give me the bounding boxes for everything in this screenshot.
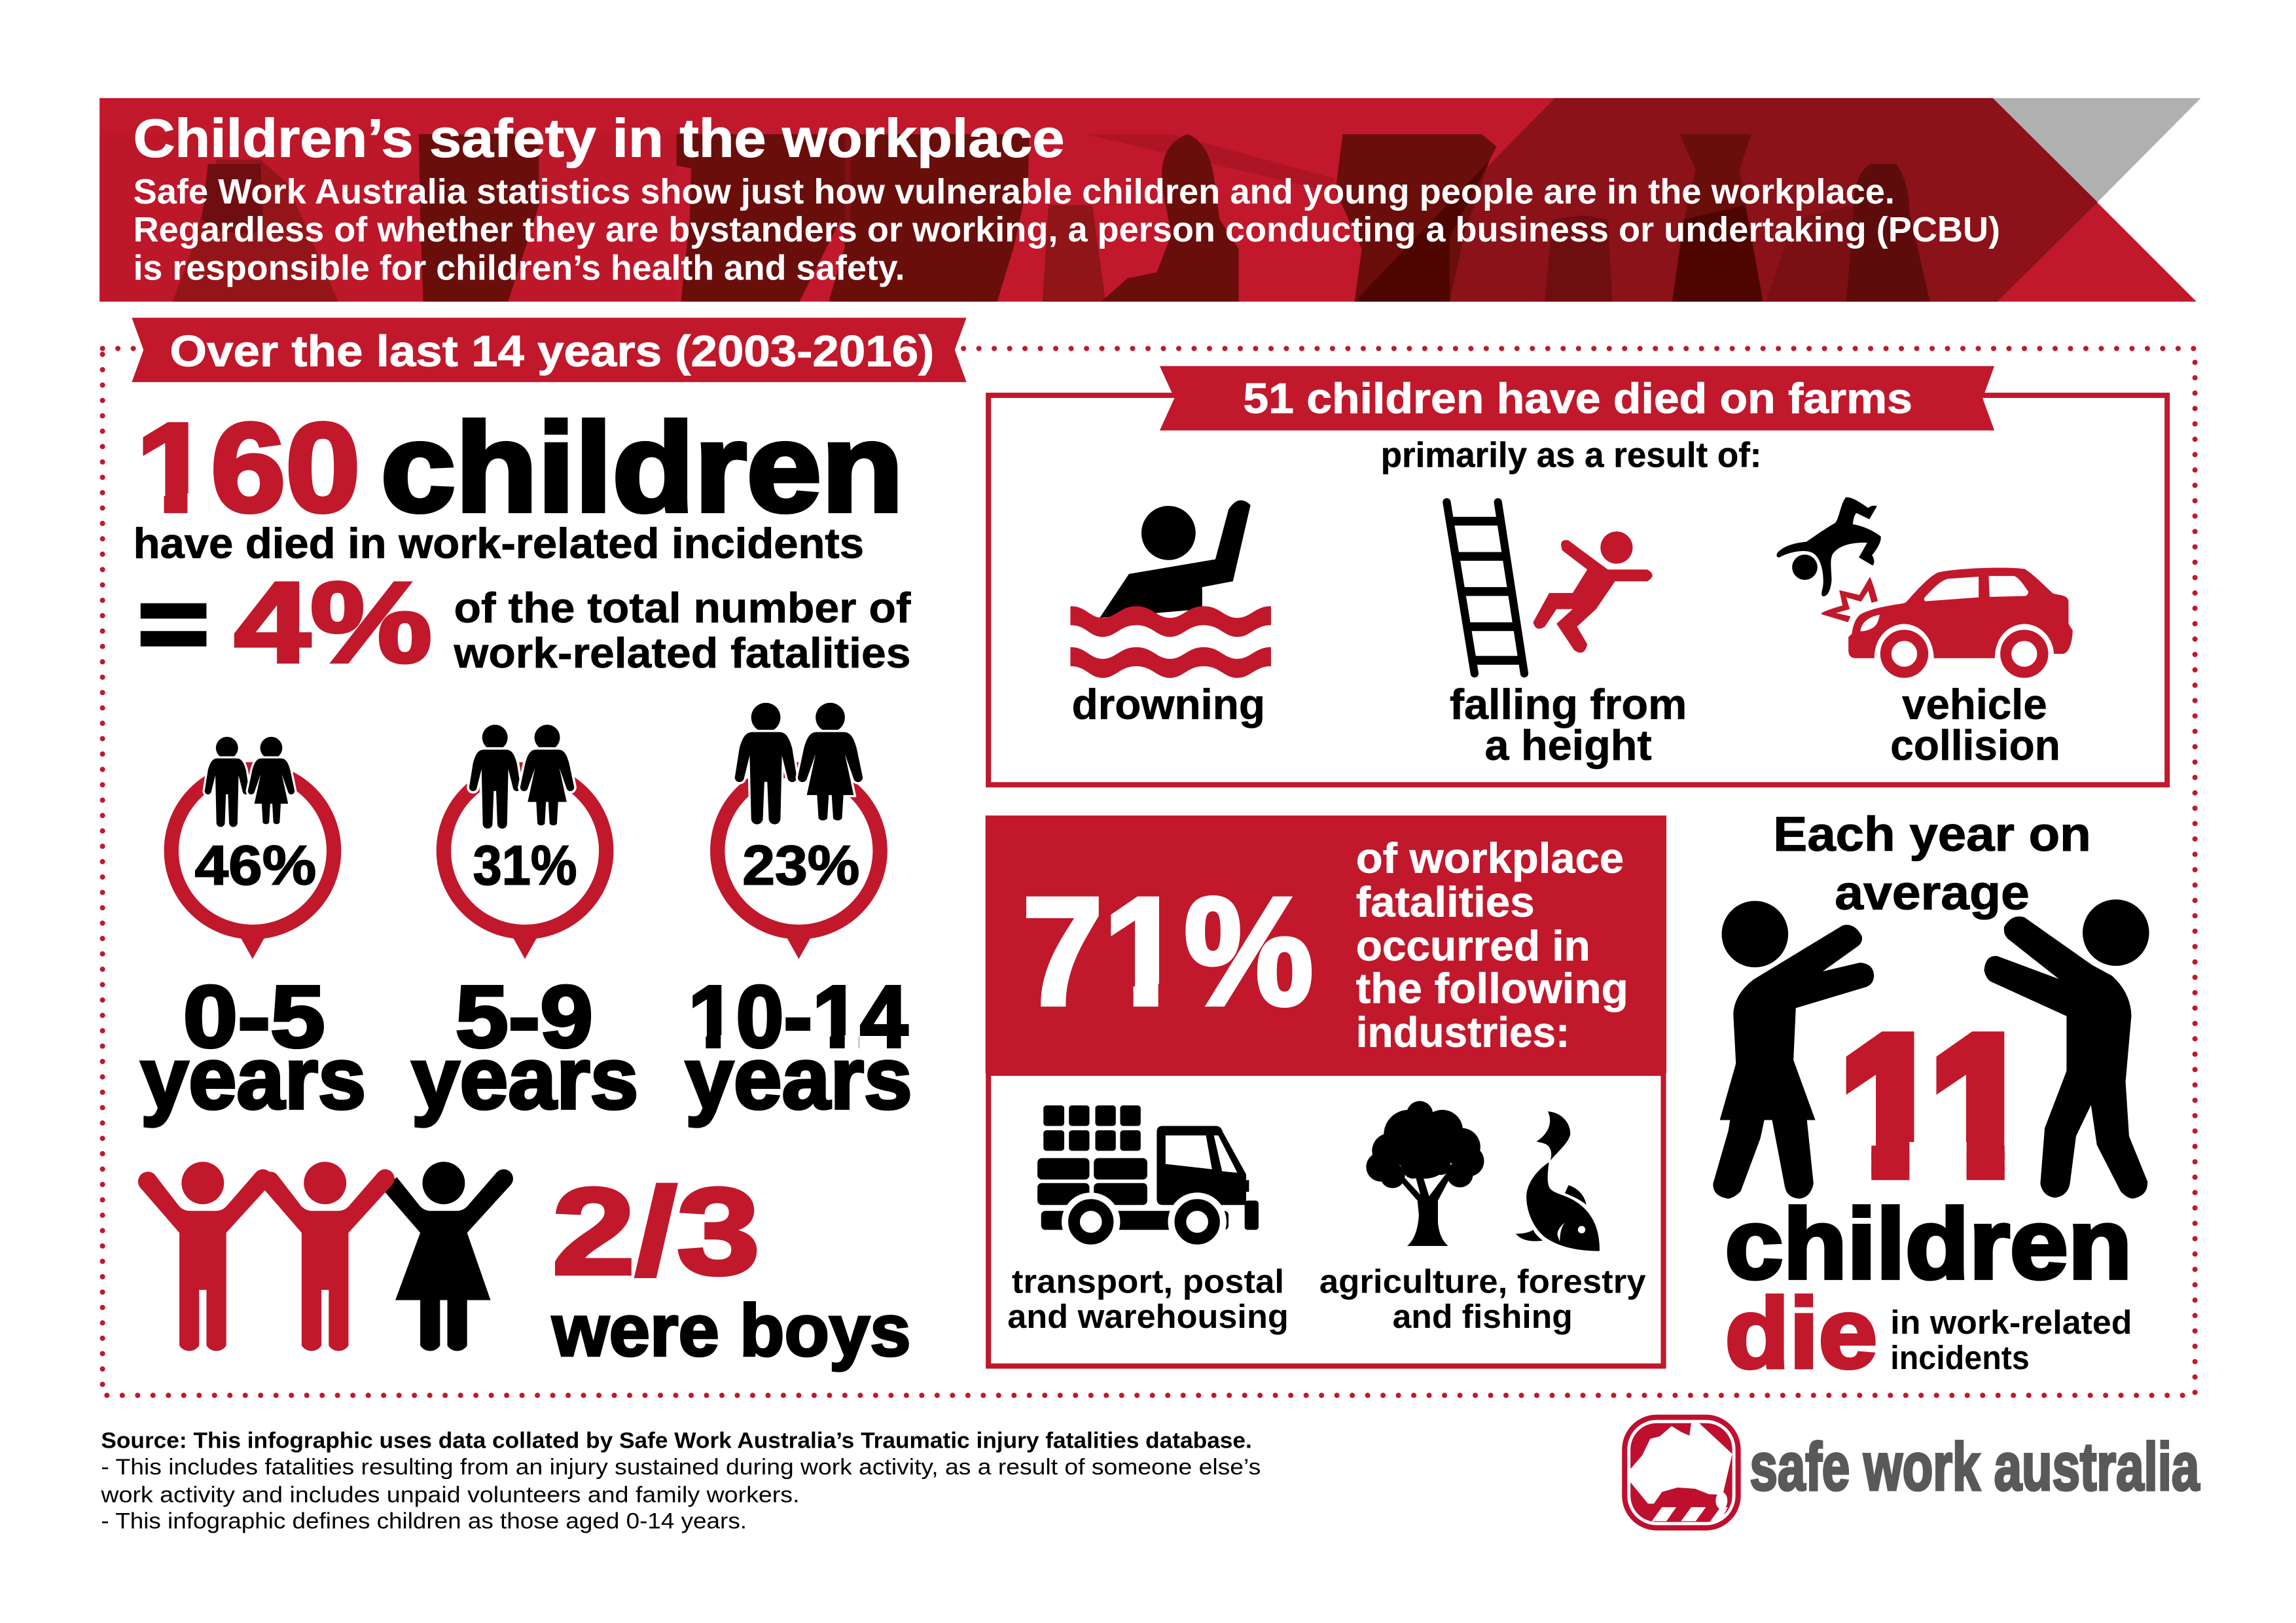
icon: vehicle collision [1776, 497, 2073, 672]
label: transport, postal and warehousing [1007, 1262, 1289, 1335]
text: die: die [1725, 1278, 1877, 1389]
source notes: work activity and includes unpaid volunteers and family workers. [100, 1482, 800, 1507]
text: in work-related incidents [1890, 1303, 2132, 1376]
label: falling from a height: a height [1485, 721, 1652, 769]
stat: 160 children: children [381, 397, 903, 538]
panel: 71 percent of fatalities by industry [986, 815, 1666, 1366]
icon: two boys and a girl with raised arms [138, 1162, 513, 1351]
banner introduction [134, 172, 2000, 287]
text: of workplace fatalities [1356, 834, 1628, 1056]
label: falling from a height: falling from [1450, 680, 1687, 728]
age group: 10-14 years [685, 703, 912, 1128]
heading: each year on average: Each year on [1773, 807, 2091, 861]
source notes [100, 1429, 1261, 1534]
age label [685, 968, 912, 1128]
text: children: children [1725, 1188, 2132, 1300]
age label: 5-9 [456, 968, 593, 1066]
icon: boy reaching [1984, 899, 2149, 1199]
heading ribbon: over the last 14 years: Over the last 14 years (2003-2016) [170, 327, 934, 376]
heading: each year on average [1773, 807, 2091, 919]
pin ring [171, 770, 334, 959]
percent: 23% [742, 834, 859, 897]
stat: equals 4 percent: work-related fatalities [453, 629, 911, 677]
text: of workplace fatalities: occurred in [1356, 922, 1590, 970]
banner introduction: Safe Work Australia statistics show just how vulnerable children and young people are in the workplace. [134, 172, 1895, 211]
stat: two thirds were boys: were boys [551, 1290, 911, 1372]
banner photo: silhouetted people [99, 134, 1930, 302]
stat: 71%: 71% [1022, 865, 1314, 1037]
stat: two thirds were boys [551, 1162, 911, 1372]
icon: tree [1366, 1101, 1484, 1246]
logo mark [1624, 1418, 1738, 1528]
text: have died in work-related incidents: have died in work-related incidents [134, 519, 864, 567]
pin ring [444, 770, 606, 959]
stat: 11: 11 [1840, 997, 2031, 1215]
stat: 160 children [136, 397, 903, 538]
panel: each year on average 11 children die [1713, 807, 2149, 1389]
falling person [1776, 497, 1881, 596]
source notes: Source: This infographic uses data collated by Safe Work Australia’s Traumatic injury fatalities database. [101, 1429, 1252, 1454]
percent: 31% [473, 834, 577, 897]
logo: safe work australia [1624, 1418, 2200, 1528]
banner introduction: Regardless of whether they are bystanders or working, a person conducting a business or undertaking (PCBU) [134, 210, 2000, 249]
age label: years [412, 1029, 638, 1128]
heading: each year on average: average [1835, 865, 2030, 919]
panel: farm deaths [988, 366, 2167, 785]
label: drowning: drowning [1072, 680, 1265, 728]
stat: two thirds were boys: 2/3 [552, 1162, 760, 1300]
icon: girl reaching [1713, 901, 1874, 1199]
impact star [1821, 577, 1878, 622]
icon: drowning [1070, 500, 1271, 678]
icon: boy and girl [205, 737, 295, 827]
icon: falling from a ladder [1446, 502, 1653, 673]
car [1848, 567, 2073, 672]
label: falling from a height [1450, 680, 1687, 769]
age label [412, 968, 638, 1128]
source notes: - This includes fatalities resulting from an injury sustained during work activity, as a result of someone else’s [101, 1455, 1261, 1480]
pin ring [717, 770, 880, 959]
age label: 0-5 [183, 968, 325, 1066]
heading ribbon: 51 children have died on farms: 51 children have died on farms [1243, 374, 1912, 422]
text: of workplace fatalities: industries: [1356, 1008, 1570, 1056]
subheading: primarily as a result of: [1381, 436, 1761, 475]
label: agriculture, forestry and fishing [1319, 1262, 1646, 1335]
age label: years [141, 1029, 366, 1128]
label: vehicle collision [1890, 680, 2060, 769]
text: of workplace fatalities: the following [1356, 965, 1628, 1012]
label: vehicle collision: vehicle [1902, 680, 2047, 728]
text: of workplace fatalities: fatalities [1356, 878, 1535, 926]
text: of workplace fatalities: of workplace [1356, 834, 1624, 882]
panel: header banner [99, 98, 2201, 302]
age label: 10-14 [689, 968, 908, 1066]
stat: equals 4 percent: of the total number of [454, 584, 911, 632]
age group: 0-5 years [141, 737, 366, 1128]
text: in work-related incidents: in work-related [1890, 1303, 2132, 1341]
text: in work-related incidents: incidents [1890, 1338, 2030, 1376]
age label: years [685, 1029, 912, 1128]
icon: boy and girl [735, 703, 863, 825]
label: agriculture, forestry and fishing: agriculture, forestry [1319, 1262, 1646, 1300]
icon: boy and girl [469, 724, 574, 829]
age group: 5-9 years [412, 724, 638, 1128]
source notes: - This infographic defines children as those aged 0-14 years. [101, 1509, 747, 1534]
stat: equals 4 percent: 4% [234, 558, 432, 686]
label: transport, postal and warehousing: and warehousing [1007, 1297, 1289, 1335]
heading ribbon: 51 children have died on farms [1160, 366, 1994, 431]
label: vehicle collision: collision [1890, 721, 2060, 769]
age label [141, 968, 366, 1128]
icon: truck [1037, 1105, 1259, 1251]
label: transport, postal and warehousing: transport, postal [1012, 1262, 1284, 1300]
icon: fish [1516, 1111, 1600, 1251]
banner title: Children’s safety in the workplace [134, 107, 1064, 168]
percent: 46% [195, 834, 316, 897]
label: agriculture, forestry and fishing: and fishing [1393, 1297, 1573, 1335]
stat: equals 4 percent [141, 558, 911, 686]
heading ribbon: over the last 14 years [132, 317, 967, 382]
stat: 160 children: 160 [136, 397, 360, 538]
panel: dotted frame [103, 348, 2195, 1395]
banner introduction: is responsible for children’s health and safety. [134, 248, 905, 287]
